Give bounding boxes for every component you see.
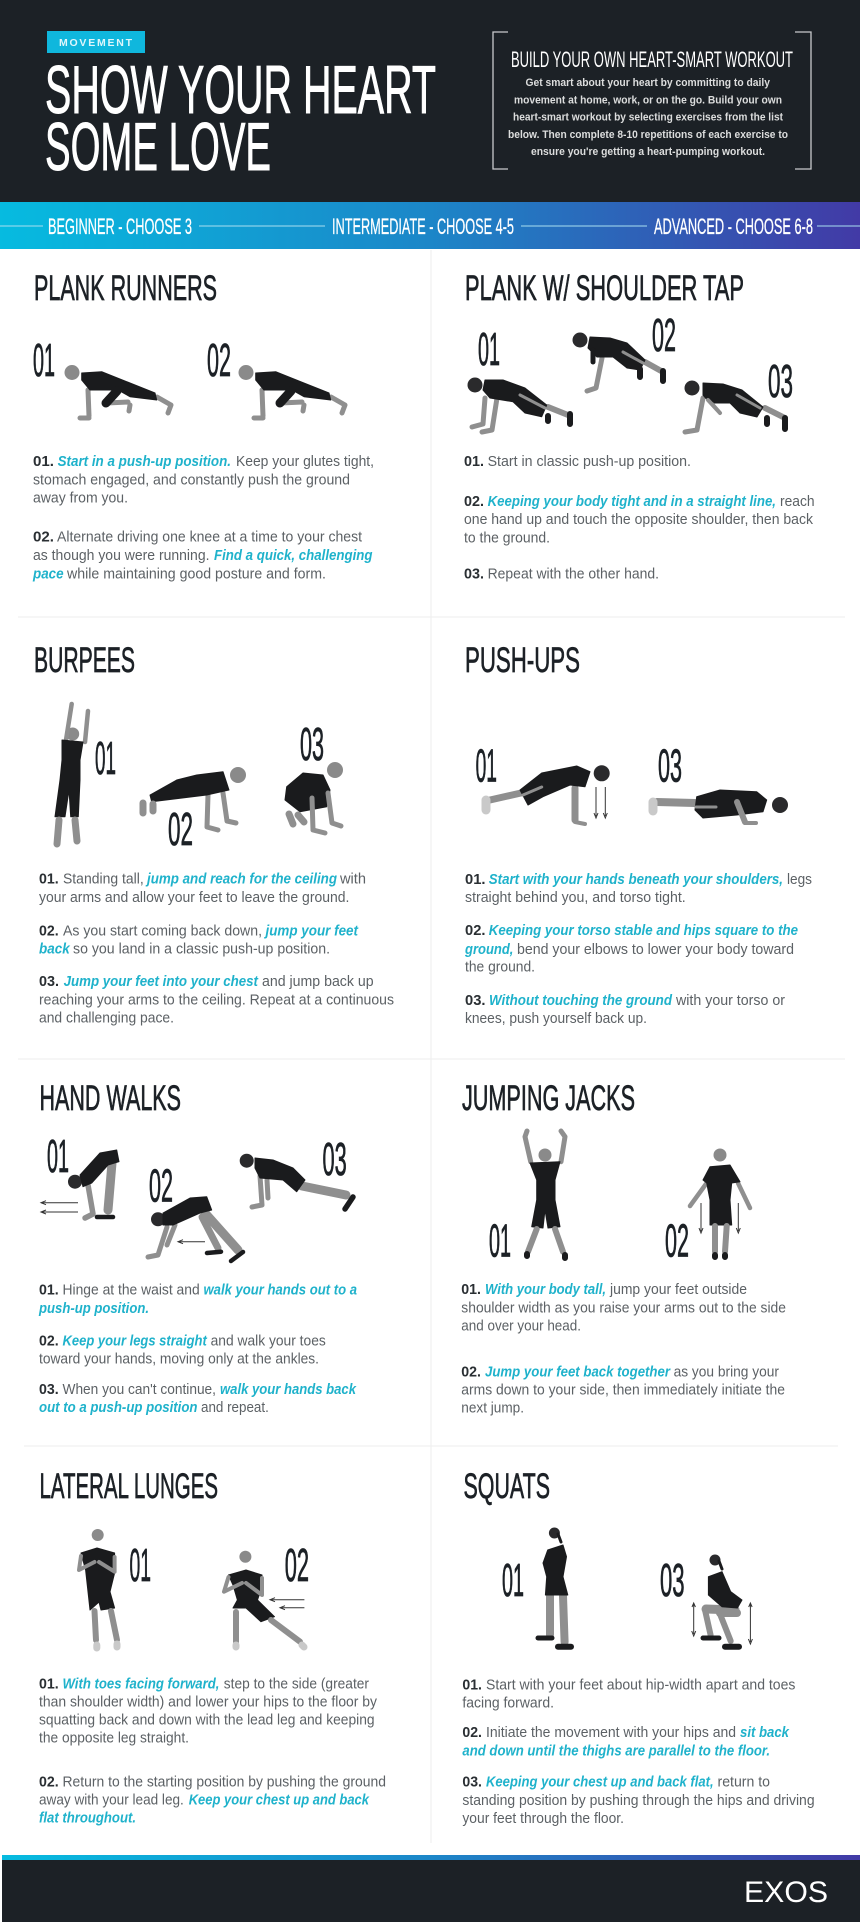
instructions: Hinge at the waist and: [62, 1283, 200, 1299]
instructions: 01.: [33, 454, 54, 470]
instructions: 02.: [39, 1774, 59, 1790]
logo: EXOS: EXOS: [744, 1876, 828, 1909]
instructions: step to the side (greater: [224, 1676, 369, 1692]
figure step 02: 02: [168, 803, 193, 855]
instructions: 03.: [464, 567, 484, 583]
instructions: next jump.: [461, 1401, 524, 1417]
figure step 03: [653, 740, 788, 823]
instructions: 02.: [462, 1725, 482, 1741]
figure step 01: 01: [476, 740, 497, 792]
instructions: 01.: [39, 1283, 59, 1299]
heading: SQUATS: [464, 1467, 550, 1506]
instructions: and challenging pace.: [39, 1011, 174, 1027]
instructions: Find a quick, challenging: [214, 548, 373, 564]
instructions: knees, push yourself back up.: [465, 1011, 647, 1027]
figure step 01: 01: [478, 323, 500, 375]
instructions: sit back: [740, 1725, 790, 1741]
instructions: Start with your feet about hip-width apart and toes: [486, 1677, 795, 1693]
intro text: movement at home, work, or on the go. Build your own: [514, 94, 782, 106]
figure step 03: 03: [300, 718, 324, 770]
heading: BURPEES: [34, 641, 135, 680]
instructions: as you bring your: [674, 1364, 779, 1380]
figure step 03: [660, 1554, 752, 1647]
intro text: Get smart about your heart by committing to daily: [526, 77, 771, 89]
panel: lateral lunges: [39, 1467, 386, 1826]
figure step 01: [489, 1131, 565, 1267]
panel: burpees: 01: [95, 732, 116, 784]
instructions: back: [39, 942, 71, 958]
arrow: [178, 1240, 205, 1244]
figure step 01: 01: [47, 1130, 69, 1182]
instructions: Keeping your torso stable and hips square to the: [489, 923, 798, 939]
instructions: Start in classic push-up position.: [488, 454, 691, 470]
instructions: reach: [780, 494, 815, 510]
heading: PUSH-UPS: [465, 641, 580, 680]
panel: plank with shoulder tap: 02: [652, 309, 676, 361]
instructions: ground,: [464, 942, 513, 958]
instructions: 01.: [461, 1282, 481, 1298]
figure step 01: [476, 740, 610, 824]
footer: [2, 1855, 860, 1922]
instructions: As you start coming back down,: [63, 923, 262, 939]
instructions: push-up position.: [38, 1301, 149, 1317]
instructions: and repeat.: [201, 1400, 269, 1416]
instructions: 02.: [465, 923, 486, 939]
instructions: the opposite leg straight.: [39, 1731, 189, 1747]
figure step 02: [143, 767, 246, 855]
instructions: [464, 872, 812, 1027]
instructions: return to: [718, 1775, 770, 1791]
instructions: stomach engaged, and constantly push the ground: [33, 472, 350, 488]
intro text: below. Then complete 8-10 repetitions of each exercise to: [508, 129, 788, 141]
figure step 02: [224, 1539, 309, 1647]
instructions: with: [339, 872, 366, 888]
level band: BEGINNER - CHOOSE 3: [48, 214, 192, 239]
instructions: Keep your chest up and back: [189, 1792, 370, 1808]
figure step 01: [468, 323, 570, 432]
panel: jumping jacks: [461, 1079, 786, 1417]
figure step 01: 01: [489, 1215, 511, 1267]
level band: INTERMEDIATE - CHOOSE 4-5: [332, 214, 514, 239]
figure step 02: [572, 309, 676, 391]
instructions: walk your hands back: [220, 1382, 357, 1398]
figure step 01: [33, 334, 171, 418]
instructions: With toes facing forward,: [62, 1676, 219, 1692]
instructions: bend your elbows to lower your body toward: [517, 942, 794, 958]
instructions: straight behind you, and torso tight.: [465, 890, 686, 906]
tag: movement: [47, 31, 145, 53]
panel: plank runners: [32, 269, 374, 582]
figure step 03: [285, 718, 343, 833]
instructions: 02.: [39, 1333, 59, 1349]
instructions: 03.: [39, 1382, 59, 1398]
panel: lateral lunges: 01: [130, 1539, 151, 1591]
instructions: the ground.: [465, 960, 535, 976]
instructions: Keeping your chest up and back flat,: [486, 1775, 714, 1791]
arrows: [41, 1201, 78, 1214]
instructions: and down until the thighs are parallel to the floor.: [462, 1743, 770, 1759]
instructions: [39, 1676, 386, 1826]
intro box: [493, 32, 811, 169]
instructions: pace: [32, 566, 64, 582]
panel: push-ups: [464, 641, 812, 1027]
figure step 01: [41, 1130, 119, 1218]
figure step 01: [502, 1528, 571, 1647]
figure step 02: [665, 1148, 750, 1267]
instructions: jump and reach for the ceiling: [145, 872, 337, 888]
figure step 03: 03: [658, 740, 682, 792]
instructions: toward your hands, moving only at the ankles.: [39, 1351, 319, 1367]
figure step 03: 03: [660, 1554, 685, 1606]
instructions: and walk your toes: [211, 1333, 326, 1349]
instructions: squatting back and down with the lead leg and keeping: [39, 1713, 375, 1729]
instructions: Return to the starting position by pushing the ground: [62, 1774, 386, 1790]
instructions: with your torso or: [675, 993, 785, 1009]
panel: hand walks: [38, 1079, 357, 1416]
instructions: standing position by pushing through the hips and driving: [462, 1793, 815, 1809]
instructions: 01.: [465, 872, 486, 888]
panel: burpees: [34, 641, 394, 1027]
instructions: [32, 454, 374, 582]
arrows: [594, 787, 607, 818]
instructions: [38, 1283, 357, 1416]
intro text: [508, 77, 788, 158]
arrows: [270, 1598, 304, 1610]
instructions: jump your feet outside: [609, 1282, 747, 1298]
figure step 03: [240, 1133, 353, 1209]
instructions: than shoulder width) and lower your hips to the floor by: [39, 1695, 378, 1711]
instructions: flat throughout.: [39, 1810, 136, 1826]
heading: LATERAL LUNGES: [40, 1467, 218, 1506]
instructions: 01.: [462, 1677, 482, 1693]
figure step 02: 02: [207, 334, 231, 386]
instructions: legs: [787, 872, 812, 888]
instructions: Alternate driving one knee at a time to your chest: [57, 530, 362, 546]
heading: JUMPING JACKS: [462, 1079, 635, 1118]
instructions: one hand up and touch the opposite shoulder, then back: [464, 512, 814, 528]
instructions: 01.: [39, 872, 59, 888]
figure step 01: [55, 704, 116, 844]
title: SOME LOVE: [45, 109, 271, 185]
instructions: [461, 1282, 786, 1417]
figure step 02: 02: [149, 1160, 173, 1212]
figure step 01: [79, 1529, 151, 1648]
instructions: facing forward.: [462, 1695, 554, 1711]
instructions: 02.: [39, 923, 59, 939]
instructions: as though you were running.: [33, 548, 210, 564]
instructions: and over your head.: [461, 1318, 581, 1334]
instructions: 02.: [464, 494, 484, 510]
instructions: 02.: [33, 530, 54, 546]
instructions: [462, 1677, 815, 1827]
arrows: [692, 1603, 752, 1644]
instructions: 01.: [464, 454, 484, 470]
instructions: away with your lead leg.: [39, 1792, 184, 1808]
instructions: 03.: [39, 974, 59, 990]
instructions: When you can't continue,: [62, 1382, 216, 1398]
figure step 02: [207, 334, 345, 418]
instructions: out to a push-up position: [39, 1400, 198, 1416]
instructions: your feet through the floor.: [462, 1811, 624, 1827]
instructions: reaching your arms to the ceiling. Repeat at a continuous: [39, 993, 394, 1009]
tag: movement: MOVEMENT: [59, 37, 133, 49]
instructions: Start with your hands beneath your shoulders,: [489, 872, 783, 888]
instructions: [39, 872, 394, 1027]
header: [0, 0, 860, 202]
instructions: 02.: [461, 1364, 481, 1380]
heading: HAND WALKS: [40, 1079, 181, 1118]
instructions: Jump your feet back together: [485, 1364, 671, 1380]
instructions: With your body tall,: [485, 1282, 606, 1298]
level band: [0, 202, 860, 249]
instructions: to the ground.: [464, 530, 550, 546]
instructions: Jump your feet into your chest: [64, 974, 259, 990]
instructions: while maintaining good posture and form.: [66, 566, 326, 582]
instructions: 03.: [465, 993, 486, 1009]
instructions: Without touching the ground: [489, 993, 673, 1009]
panel: plank with shoulder tap: [464, 269, 815, 583]
title: SHOW YOUR HEART: [45, 52, 436, 128]
figure step 03: 03: [322, 1133, 347, 1185]
intro text: ensure you're getting a heart-pumping workout.: [531, 146, 765, 158]
panel: squats: [462, 1467, 815, 1827]
intro text: heart-smart workout by selecting exercises from the list: [513, 112, 783, 124]
instructions: your arms and allow your feet to leave the ground.: [39, 890, 349, 906]
instructions: shoulder width as you raise your arms out to the side: [461, 1300, 786, 1316]
instructions: and jump back up: [262, 974, 374, 990]
instructions: 01.: [39, 1676, 59, 1692]
instructions: Keep your legs straight: [62, 1333, 208, 1349]
figure step 02: [148, 1160, 243, 1261]
instructions: Keep your glutes tight,: [236, 454, 374, 470]
instructions: [464, 454, 815, 583]
instructions: walk your hands out to a: [204, 1283, 357, 1299]
arrows: [699, 1203, 740, 1233]
figure step 02: 02: [665, 1215, 689, 1267]
figure step 03: [684, 355, 793, 432]
panel: plank with shoulder tap: 03: [768, 355, 793, 407]
instructions: Standing tall,: [63, 872, 144, 888]
instructions: jump your feet: [264, 923, 359, 939]
instructions: so you land in a classic push-up position.: [73, 942, 330, 958]
figure step 01: 01: [33, 334, 55, 386]
title: [45, 52, 436, 185]
instructions: 03.: [462, 1775, 482, 1791]
panel: lateral lunges: 02: [285, 1539, 309, 1591]
instructions: arms down to your side, then immediately initiate the: [461, 1382, 785, 1398]
instructions: Start in a push-up position.: [58, 454, 231, 470]
instructions: away from you.: [33, 491, 128, 507]
instructions: Keeping your body tight and in a straight line,: [488, 494, 776, 510]
heading: PLANK RUNNERS: [34, 269, 217, 308]
instructions: Initiate the movement with your hips and: [486, 1725, 736, 1741]
instructions: Repeat with the other hand.: [488, 567, 659, 583]
figure step 01: 01: [502, 1554, 524, 1606]
